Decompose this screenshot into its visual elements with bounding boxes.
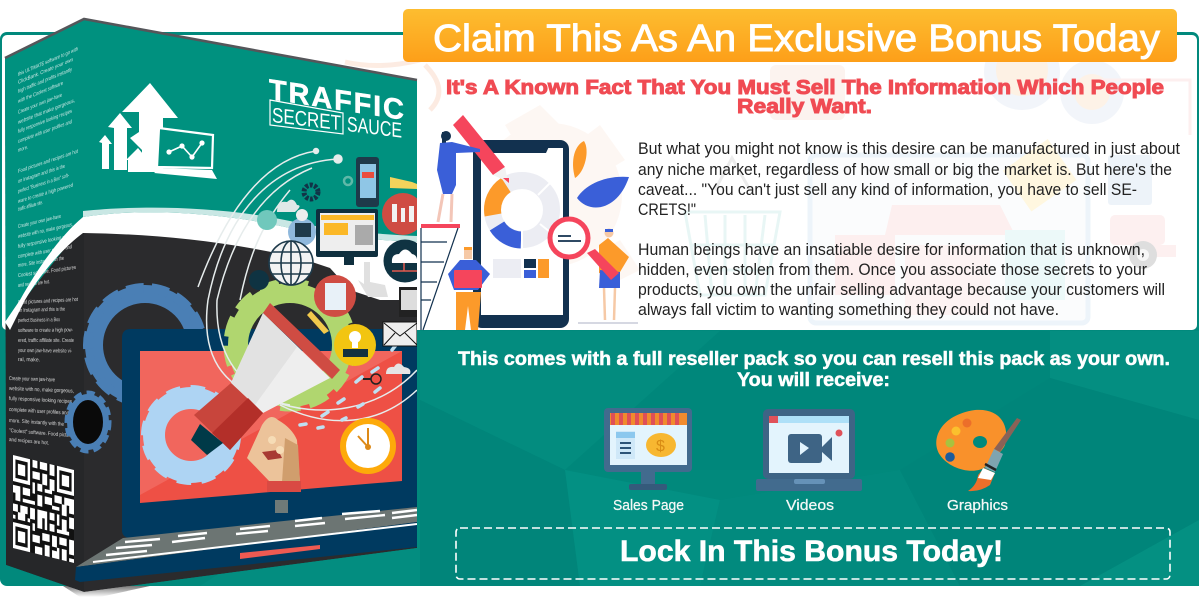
side text: ered, traffic affiliate site. Create <box>18 338 74 344</box>
side text: fully responsive looking recipes <box>18 109 72 135</box>
pale storefront <box>810 155 1088 323</box>
illustration: phone analytics team <box>421 115 638 330</box>
side text: Create your own jaw-have <box>18 214 61 230</box>
icon labels: Videos <box>786 498 834 514</box>
cloud circle <box>384 240 417 282</box>
magnifier <box>550 219 619 280</box>
body text: caveat... "You can't just sell any kind of information, you have to sell SE- <box>638 181 1137 199</box>
side text: Food pictures and recipes are hot <box>18 297 78 306</box>
box top edge <box>5 19 417 80</box>
red doc circle <box>314 275 356 317</box>
side text: Create your own jaw-have <box>18 93 62 116</box>
laptop body <box>75 329 417 582</box>
QR code <box>13 455 74 563</box>
teal top of box <box>5 19 417 325</box>
side text: this ULTIMATE software to go with <box>18 46 78 78</box>
side text: Food pictures and recipes are hot <box>18 149 78 175</box>
side text: your own jaw-have website vi- <box>18 348 72 355</box>
pale gears top right <box>984 34 1124 124</box>
side text <box>8 46 78 447</box>
megaphone <box>191 303 340 455</box>
icon: palette and brush <box>936 410 1021 491</box>
side text: more. Site instantly with the <box>18 256 64 269</box>
gear icon <box>304 185 318 199</box>
pale shopping basket <box>685 158 780 295</box>
side text: "Coolest" software. Food pictures <box>9 428 75 439</box>
side text: on Instagram and this is the <box>18 164 65 185</box>
clock <box>340 418 396 474</box>
side text: fully responsive looking recipes <box>18 232 76 250</box>
fist <box>247 417 301 492</box>
reseller pack text: This comes with a full reseller pack so you can resell this pack as your own. <box>458 349 1170 370</box>
small monitor right <box>399 287 417 317</box>
icon: laptop with line chart <box>154 128 217 179</box>
icon labels: Sales Page <box>613 498 684 514</box>
side text: Coolest software. Food pictures <box>18 265 76 279</box>
body text: products, you own the unfair selling advantage because your customers will <box>638 281 1165 299</box>
icon: sales page monitor <box>604 408 692 490</box>
icons cluster <box>249 157 426 384</box>
side text: complete with user profiles and <box>18 119 72 145</box>
box logo: Traffic Secret Sauce: SECRET <box>272 104 341 135</box>
side text: complete with user profiles and <box>18 244 72 260</box>
big pencil <box>453 115 509 183</box>
box front face <box>84 233 417 592</box>
donut chart <box>492 180 555 248</box>
red heading: It's A Known Fact That You Must Sell The Information Which People <box>446 76 1164 99</box>
envelope <box>383 322 417 346</box>
product box shadow <box>63 586 150 597</box>
box logo: Traffic Secret Sauce: TRAFFIC <box>269 74 404 127</box>
panel: low-poly teal background <box>200 331 1199 586</box>
phone <box>473 140 569 328</box>
chat dark <box>249 270 269 290</box>
side text: with the Coolest software <box>17 81 63 105</box>
side text: perfect "Business in a Box" soft- <box>18 173 69 195</box>
yellow user circle <box>334 324 376 366</box>
small blue gear <box>67 393 109 451</box>
side text: software to create a high pow- <box>18 327 73 334</box>
body text: Human beings have an insatiable desire for information that is unknown, <box>638 241 1145 259</box>
icon: videos laptop <box>756 409 862 491</box>
reseller pack text <box>458 349 1170 391</box>
small cloud and lens <box>363 364 410 384</box>
pale gear behind phone <box>478 105 640 285</box>
side text: website with no, make gorgeous, <box>8 386 74 395</box>
body text: any niche market, regardless of how small or big the market is. But here's the <box>638 161 1172 179</box>
colour squares <box>493 259 549 278</box>
chat icon <box>257 210 277 230</box>
body text: hidden, even stolen from them. Once you associate those secrets to your <box>638 261 1147 279</box>
blue dashes on screen <box>300 345 396 428</box>
cloud icon <box>277 200 300 212</box>
blue gear <box>88 288 202 402</box>
leaves <box>573 141 629 208</box>
icon labels: Graphics <box>947 498 1008 514</box>
white swoosh <box>5 212 417 330</box>
orange title banner: Claim This As An Exclusive Bonus Today <box>433 18 1160 60</box>
white hand <box>358 262 388 297</box>
side text: and recipes are hot. <box>18 279 50 289</box>
box side face <box>5 19 84 592</box>
body text: always fall victim to wanting something they could not have. <box>638 301 1059 319</box>
pencil icon <box>390 177 417 189</box>
side text: traffic affiliate site. <box>18 200 43 213</box>
icon labels <box>613 498 1008 514</box>
red heading <box>446 76 1164 118</box>
side text: website with no, make gorgeous, <box>17 222 73 240</box>
woman with magnifier <box>578 228 638 323</box>
box logo: Traffic Secret Sauce: SAUCE <box>347 113 402 143</box>
body text: CRETS!" <box>638 201 696 219</box>
reseller pack text: You will receive: <box>737 370 890 391</box>
side text: ware to create a high powered <box>17 183 73 205</box>
woman on ladder <box>437 131 480 222</box>
green gear <box>228 283 352 407</box>
red chart circle <box>382 193 417 235</box>
icon: growth arrows <box>99 83 178 172</box>
side text: ClickBank. Create your own <box>18 57 73 86</box>
phone icon <box>356 157 379 207</box>
monitor <box>316 209 378 265</box>
icon: sales page monitor: $ <box>656 438 665 455</box>
side text: on Instagram and this is the <box>18 307 65 314</box>
side text: ral, make. <box>18 357 40 363</box>
product box <box>5 19 426 592</box>
body text: But what you might not know is this desire can be manufactured in just about <box>638 140 1180 158</box>
body text <box>638 140 1180 319</box>
pencil small <box>307 311 329 334</box>
side text: website that make gorgeous, <box>17 98 75 126</box>
ladder <box>421 224 460 330</box>
curved arrows <box>198 148 417 421</box>
side text: Create your own jaw-have <box>9 376 55 383</box>
panel: pale background illustration <box>345 34 1190 323</box>
side text: and recipes are hot. <box>9 437 49 447</box>
lightbulb <box>288 209 316 246</box>
side text: perfect Business in a Box <box>18 317 60 324</box>
red heading: Really Want. <box>737 95 872 118</box>
small teal gear <box>344 177 352 185</box>
man with laptop <box>448 247 490 330</box>
side text: complete with user profiles and <box>9 407 69 417</box>
side text: more. Site instantly with the <box>9 418 64 428</box>
call to action: Lock In This Bonus Today! <box>620 535 1003 568</box>
globe <box>269 241 313 285</box>
side text: more. <box>18 144 28 154</box>
pale clock top left <box>345 60 439 110</box>
side text: high traffic and profits instantly <box>18 67 72 95</box>
side text: fully responsive looking recipes <box>9 396 72 405</box>
light blue gear <box>145 389 237 481</box>
call to action <box>456 528 1170 579</box>
pale delivery elements <box>1110 215 1176 257</box>
